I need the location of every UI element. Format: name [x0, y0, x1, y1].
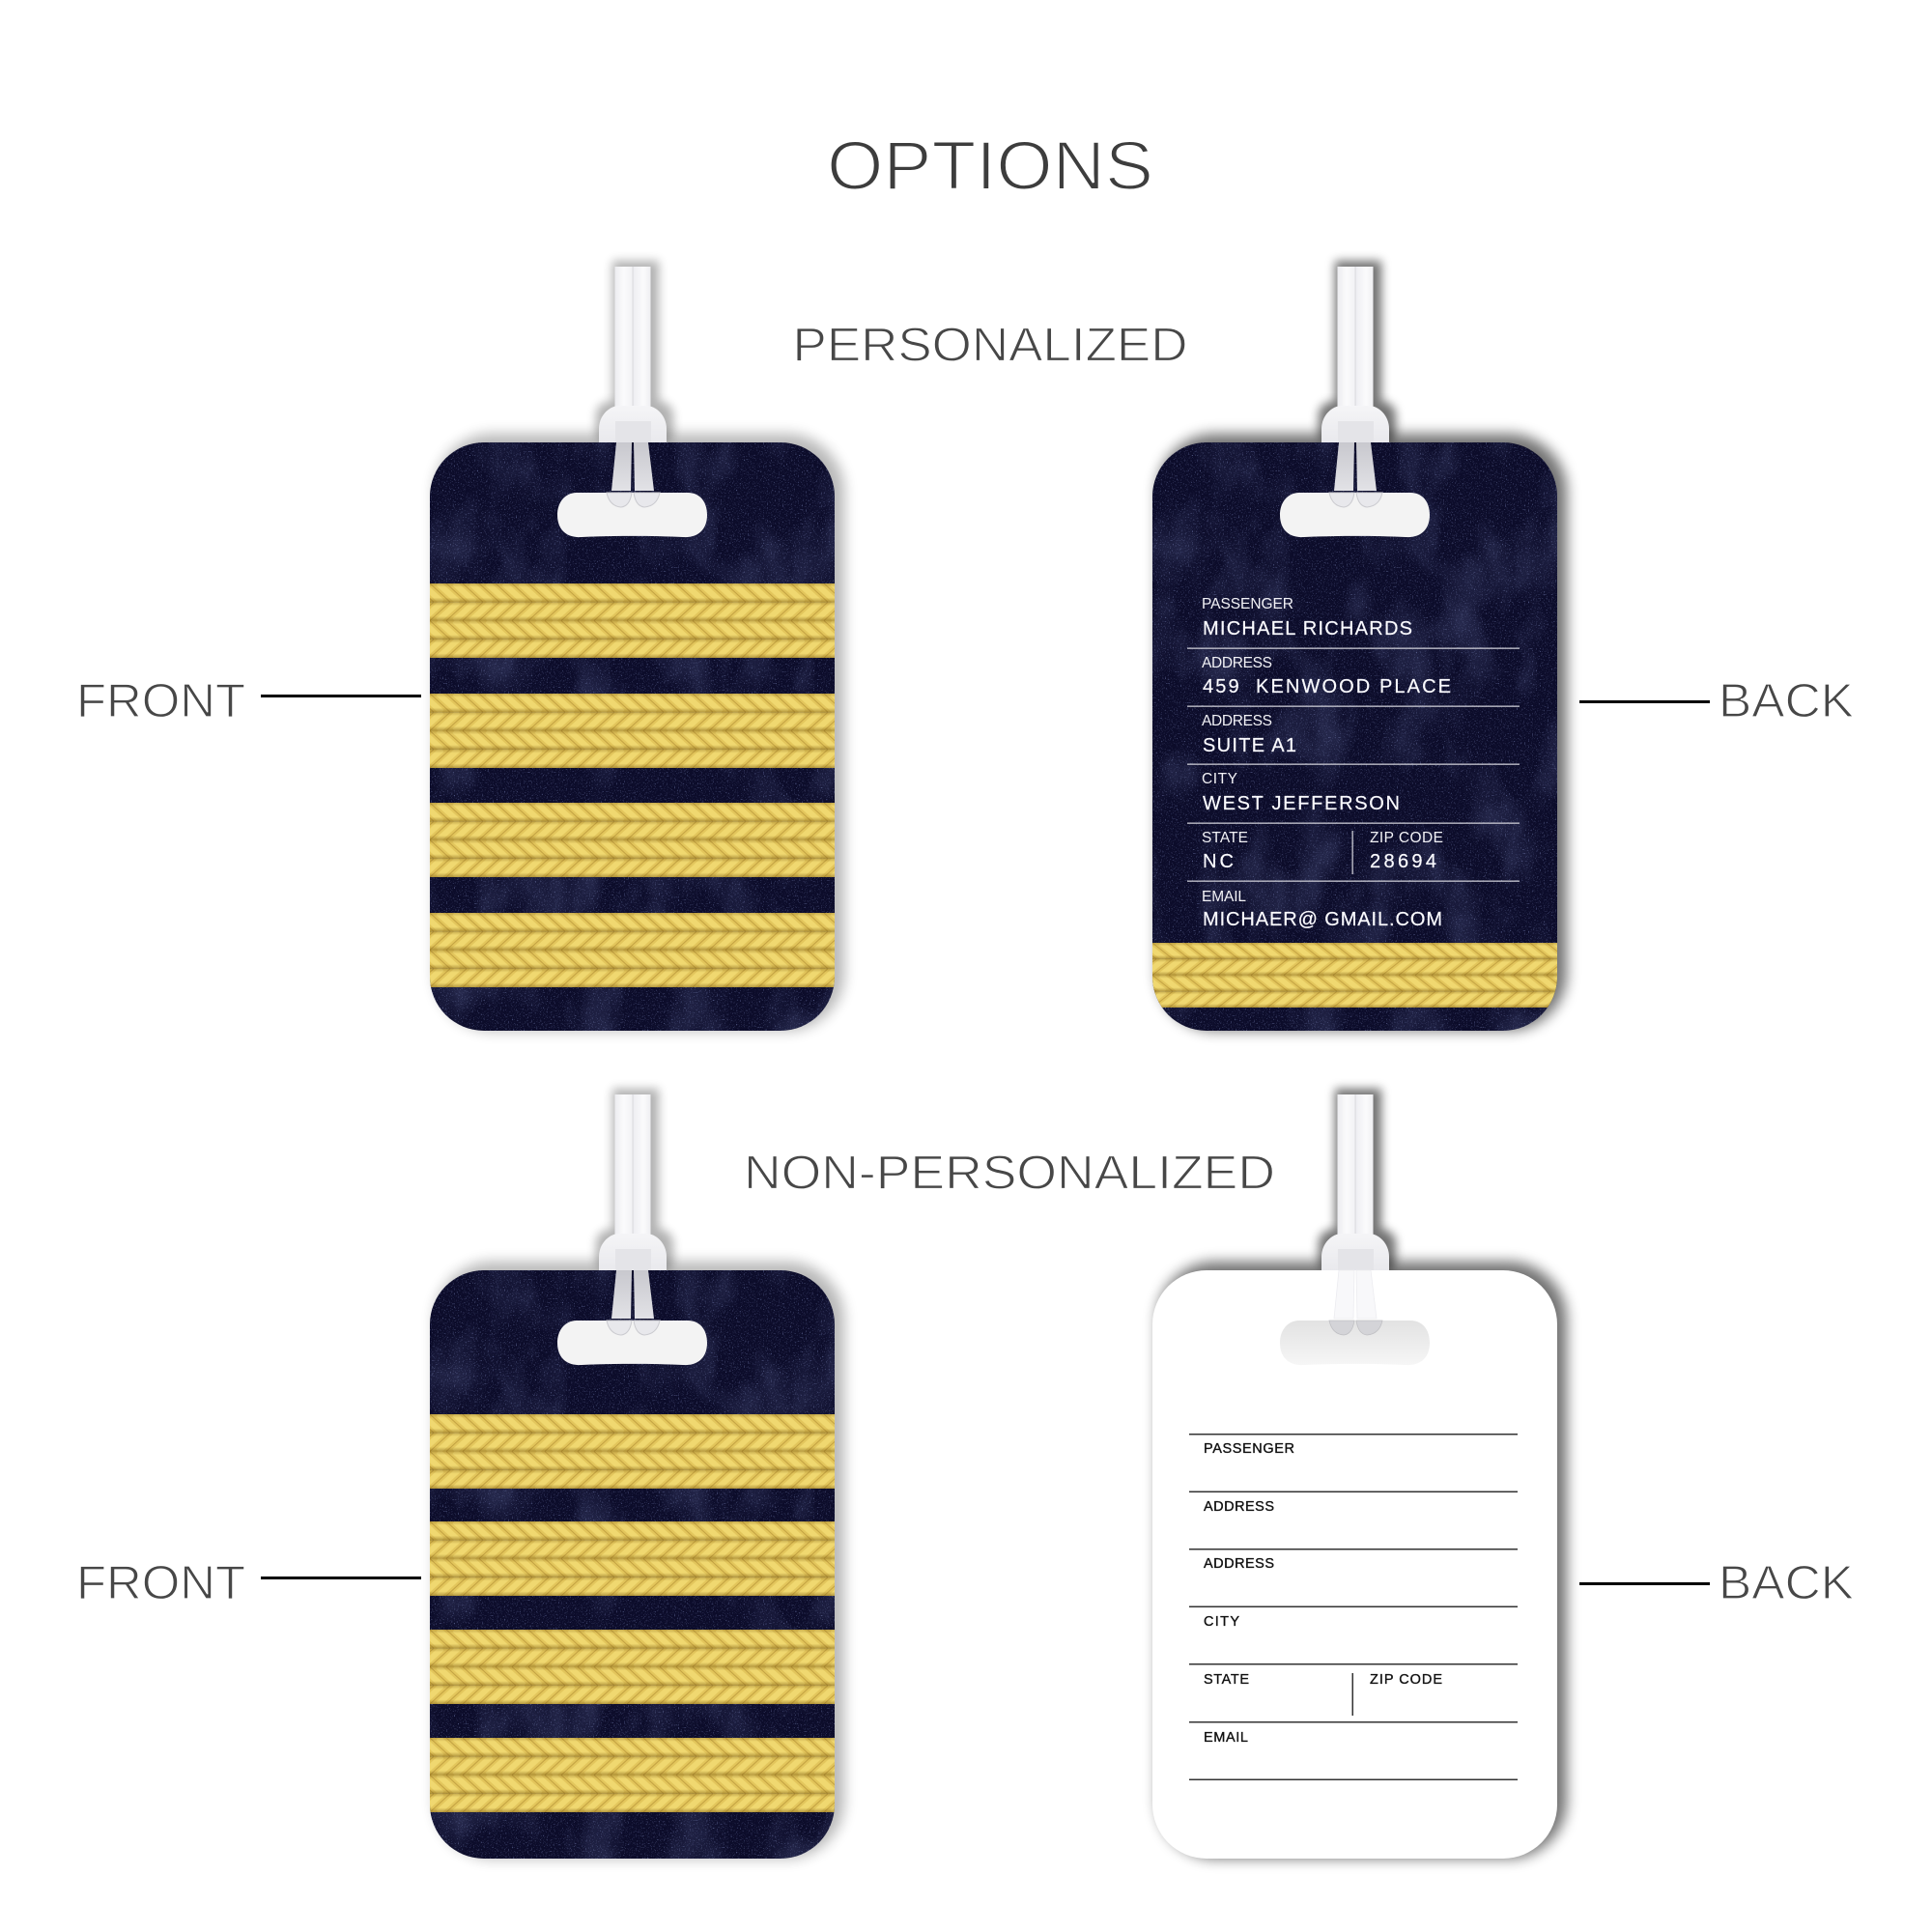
- blank field labels: STATE: [1204, 1672, 1249, 1688]
- passenger field: [1202, 596, 1412, 639]
- zip code field: ZIP CODE: [1370, 830, 1443, 846]
- email field: EMAIL: [1202, 889, 1246, 905]
- blank field labels: ADDRESS: [1204, 1499, 1274, 1515]
- state field: NC: [1203, 851, 1234, 872]
- email field: MICHAER@ GMAIL.COM: [1203, 909, 1442, 930]
- gold stripe 3: [430, 803, 835, 877]
- state field: STATE: [1202, 830, 1248, 846]
- address field 2: [1202, 713, 1296, 756]
- label: back, non-personalized: BACK: [1719, 1556, 1854, 1609]
- zip code field: 28694: [1370, 851, 1436, 872]
- passenger field: MICHAEL RICHARDS: [1203, 618, 1412, 639]
- address field 1: 459 KENWOOD PLACE: [1203, 676, 1451, 697]
- label: back, non-personalized: [1579, 1556, 1854, 1609]
- gold stripe 3: [430, 1630, 835, 1704]
- blank field labels: CITY: [1204, 1614, 1239, 1630]
- label: front, personalized: [76, 674, 421, 727]
- label: front, personalized: FRONT: [76, 674, 245, 727]
- heading: personalized: PERSONALIZED: [792, 319, 1188, 371]
- label: front, non-personalized: [76, 1556, 421, 1609]
- label: back, personalized: [1579, 674, 1854, 727]
- gold stripe 4: [430, 913, 835, 987]
- gold stripe 1: [430, 583, 835, 658]
- label: back, personalized: BACK: [1719, 674, 1854, 727]
- panel: non-personalized front luggage tag: [430, 1089, 844, 1859]
- city field: WEST JEFFERSON: [1203, 793, 1400, 814]
- address field 2: SUITE A1: [1203, 735, 1296, 756]
- address field 2: ADDRESS: [1202, 713, 1272, 729]
- city field: [1202, 771, 1400, 814]
- address field 1: [1202, 655, 1451, 697]
- gold stripe 4: [430, 1738, 835, 1812]
- blank form lines: [1189, 1434, 1518, 1780]
- label: front, non-personalized: FRONT: [76, 1556, 245, 1609]
- gold stripe 2: [430, 1521, 835, 1596]
- blank field labels: EMAIL: [1204, 1730, 1248, 1746]
- email field: [1202, 889, 1442, 930]
- blank field labels: PASSENGER: [1204, 1441, 1294, 1457]
- gold stripe 2: [430, 694, 835, 768]
- gold stripe 1: [430, 1414, 835, 1489]
- passenger field: PASSENGER: [1202, 596, 1293, 612]
- blank field labels: ADDRESS: [1204, 1556, 1274, 1572]
- gold stripe: [1152, 943, 1557, 1008]
- blank field labels: [1204, 1441, 1442, 1746]
- city field: CITY: [1202, 771, 1237, 787]
- state field: [1202, 830, 1248, 872]
- zip code field: [1370, 830, 1443, 872]
- address field 1: ADDRESS: [1202, 655, 1272, 671]
- panel: personalized back luggage tag: [1152, 261, 1567, 1031]
- panel: non-personalized blank back luggage tag: [1152, 1089, 1567, 1859]
- passenger form lines: [1187, 647, 1520, 882]
- title: OPTIONS: [827, 128, 1153, 205]
- panel: personalized front luggage tag: [430, 261, 844, 1031]
- heading: non-personalized: NON-PERSONALIZED: [744, 1146, 1275, 1200]
- blank field labels: ZIP CODE: [1370, 1672, 1442, 1688]
